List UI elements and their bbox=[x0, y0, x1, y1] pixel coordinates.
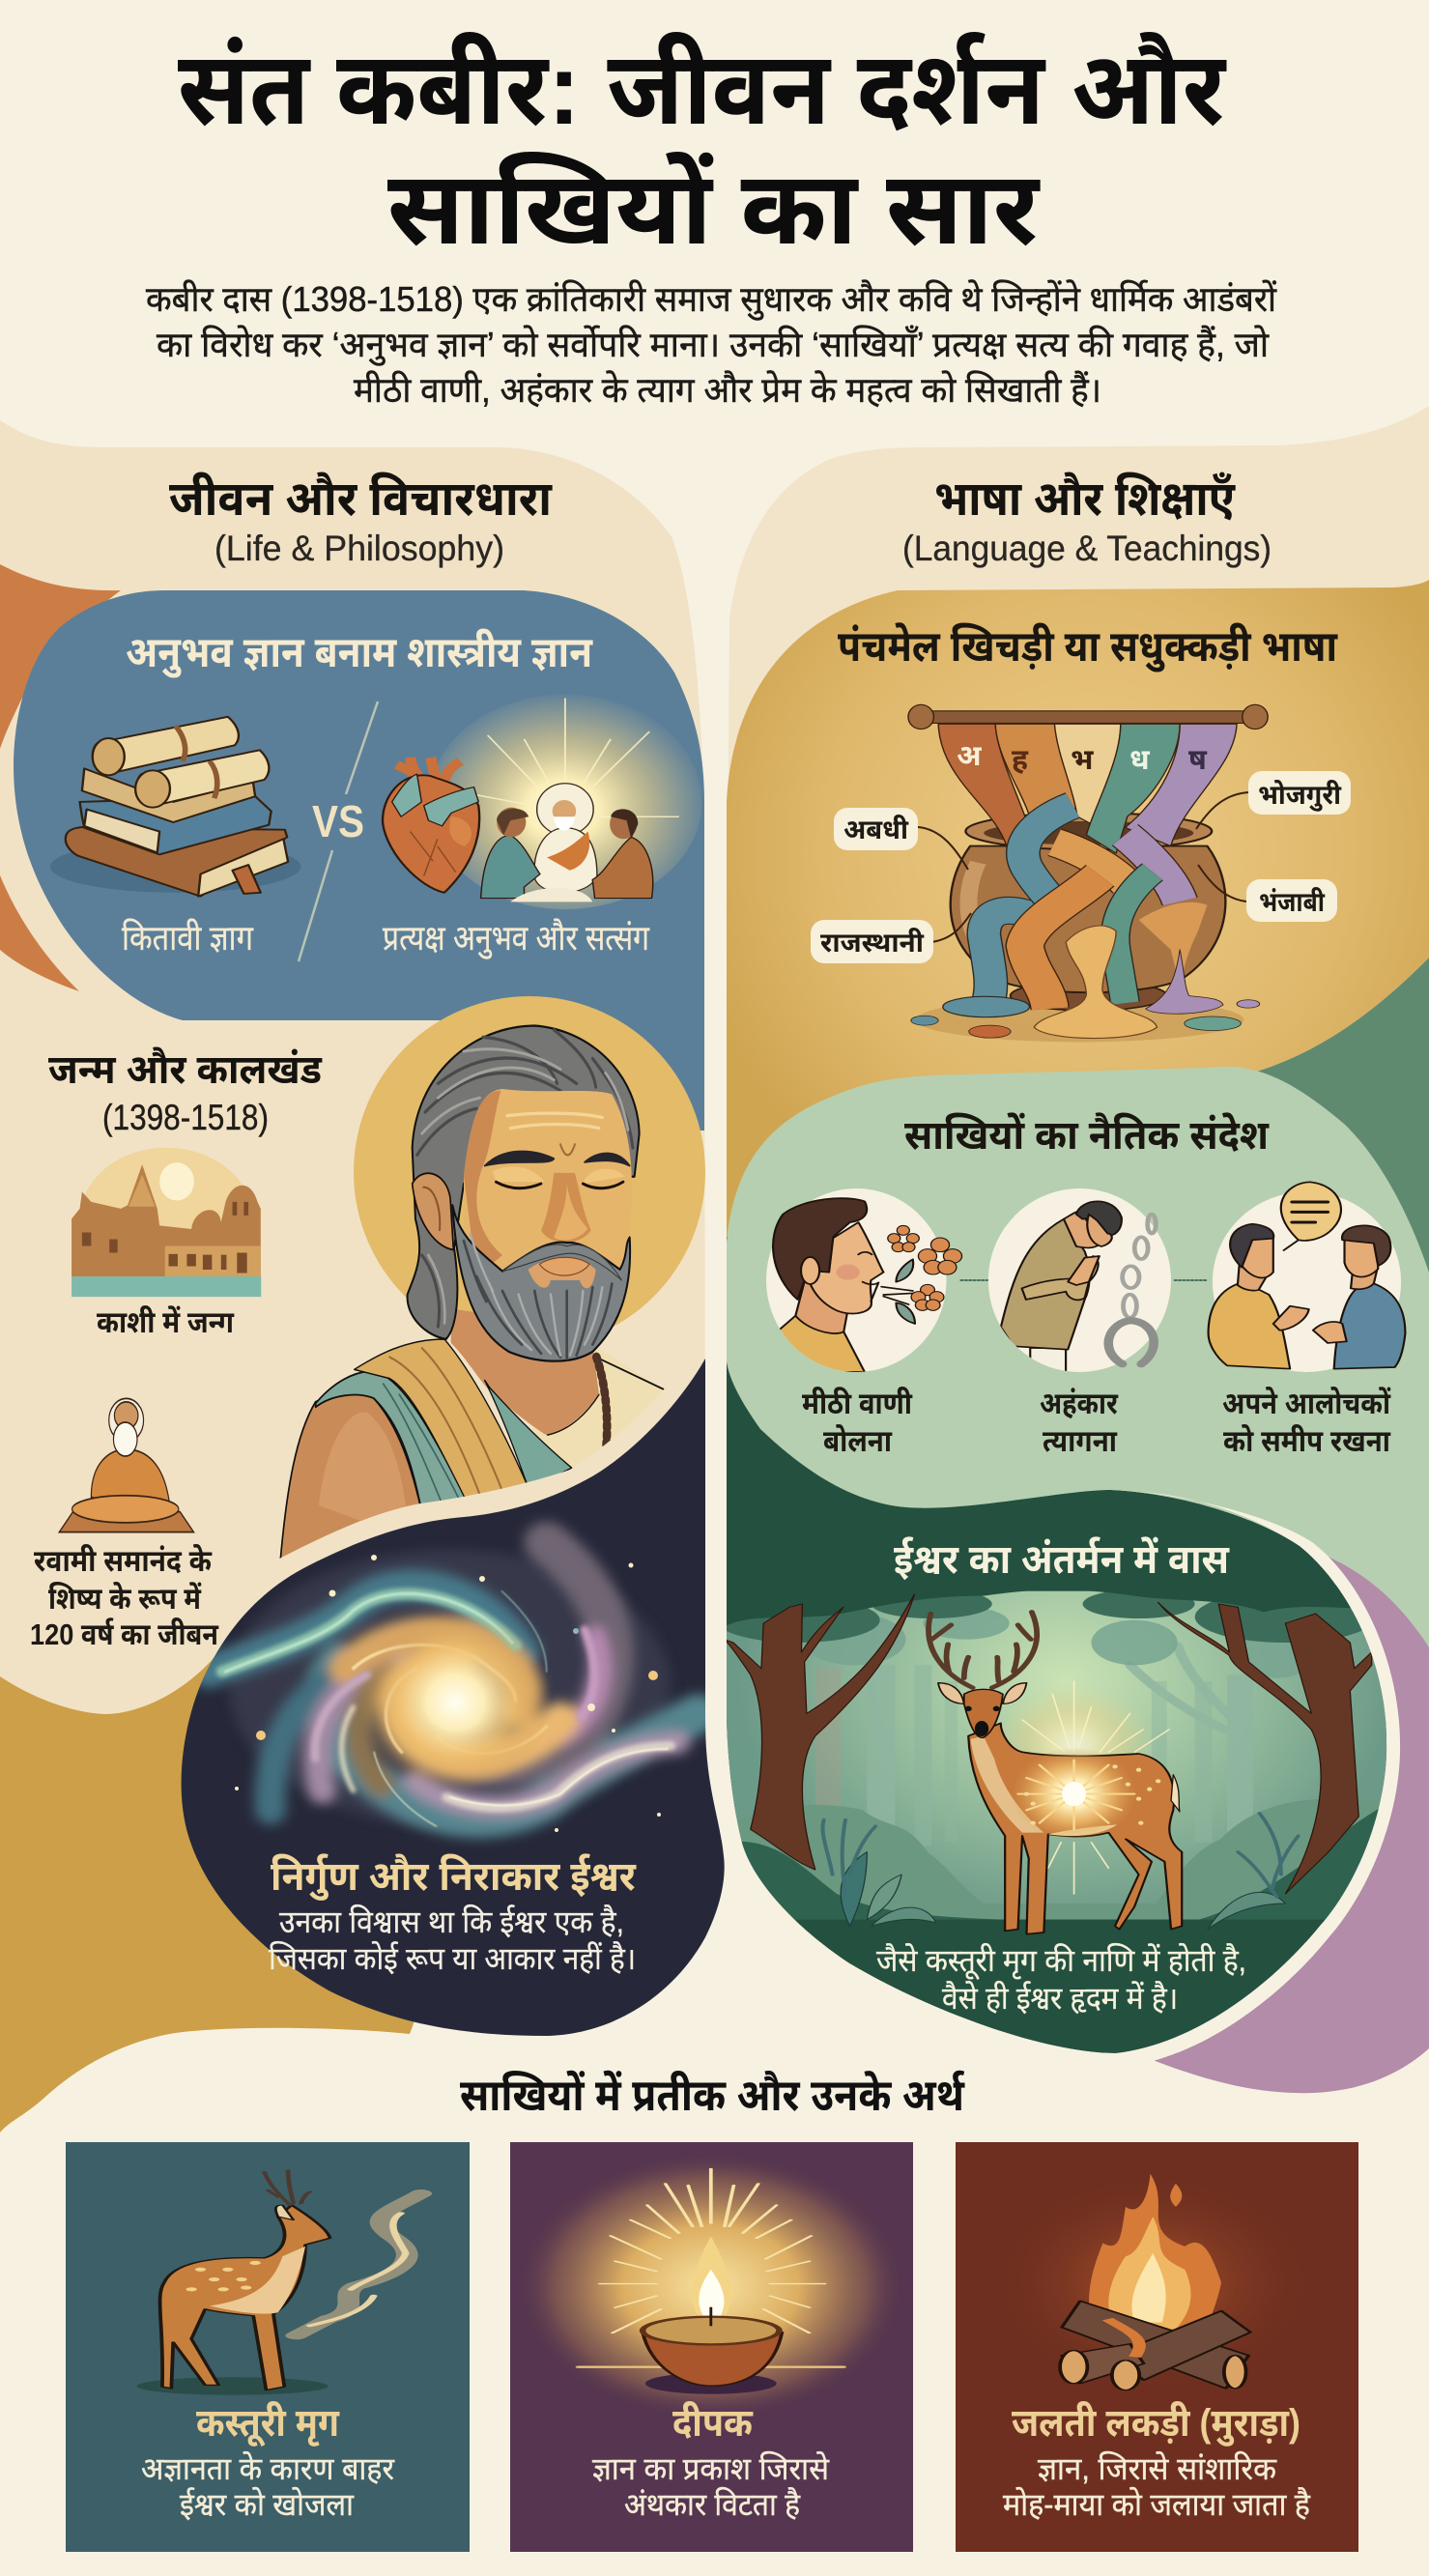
orange accent shapes bbox=[0, 564, 121, 991]
panel: god within bbox=[716, 1536, 1401, 2016]
text: disciple and lifespan: शिष्य के रूप में bbox=[48, 1582, 202, 1616]
face bbox=[464, 1089, 632, 1190]
callout lines bbox=[918, 792, 1248, 942]
label: Punjabi bbox=[1246, 879, 1337, 922]
text: book knowledge: कितावी ज्ञाग bbox=[122, 918, 254, 958]
label: Awadhi bbox=[834, 808, 918, 850]
intro paragraph: का विरोध कर ‘अनुभव ज्ञान’ को सर्वोपरि माना। उनकी ‘साखियाँ’ प्रत्यक्ष सत्य की गवाह हैं, जो bbox=[157, 324, 1270, 366]
icon: meditating guru bbox=[59, 1398, 193, 1532]
card: musk deer bbox=[66, 2142, 470, 2552]
labels: three morals: बोलना bbox=[823, 1424, 893, 1458]
label: Punjabi: भंजाबी bbox=[1259, 886, 1326, 917]
shirt and neck bbox=[531, 1348, 663, 1469]
icon: spiral galaxy bbox=[209, 1543, 699, 1832]
icon: heart and satsang bbox=[381, 696, 701, 909]
text: burning wood meaning: जलती लकड़ी (मुराड़ा) bbox=[1012, 2401, 1300, 2447]
block: birth and era bbox=[30, 1046, 323, 1651]
heading: experience vs scripture: अनुभव ज्ञान बनाम शास्त्रीय ज्ञान bbox=[126, 628, 593, 678]
label: Awadhi: अबधी bbox=[843, 814, 909, 844]
border of god within panel bbox=[843, 1492, 1400, 2068]
title bbox=[178, 32, 1227, 266]
heading: birth and era: (1398-1518) bbox=[102, 1098, 269, 1137]
text: musk deer meaning bbox=[141, 2401, 395, 2522]
text: lamp meaning: अंथकार विटता है bbox=[624, 2487, 801, 2522]
purple accent shape bbox=[1153, 1536, 1429, 2093]
text: musk deer meaning: ईश्वर को खोजला bbox=[180, 2487, 355, 2522]
text: disciple and lifespan: 120 वर्ष का जीबन bbox=[30, 1617, 219, 1651]
text: lamp meaning: ज्ञान का प्रकाश जिरासे bbox=[592, 2451, 830, 2486]
left tree bbox=[725, 1594, 914, 1870]
icon: diya lamp bbox=[515, 2151, 907, 2421]
left gold background band bbox=[0, 1449, 676, 2132]
plants bbox=[822, 1814, 1299, 1930]
text: musk deer analogy: जैसे कस्तूरी मृग की नाणि में होती है, bbox=[876, 1943, 1246, 1980]
text: musk deer analogy: वैसे ही ईश्वर हृदम में है। bbox=[942, 1981, 1178, 2016]
heading: life and philosophy: (Life & Philosophy) bbox=[214, 529, 504, 568]
text: disciple and lifespan: रवामी समानंद के bbox=[34, 1544, 213, 1578]
intro paragraph bbox=[146, 279, 1277, 410]
intro paragraph: मीठी वाणी, अहंकार के त्याग और प्रेम के महत्व को सिखाती हैं। bbox=[354, 370, 1101, 410]
teal fold bbox=[485, 1380, 572, 1488]
heading: life and philosophy bbox=[169, 472, 553, 568]
labels: three morals: अपने आलोचकों bbox=[1222, 1387, 1391, 1420]
heading: god within: ईश्वर का अंतर्मन में वास bbox=[894, 1536, 1230, 1582]
panel: formless god (galaxy) bbox=[182, 1359, 725, 2036]
green sash bbox=[316, 1371, 471, 1512]
heading: mixed language: पंचमेल खिचड़ी या सधुक्कड़ी भाषा bbox=[838, 621, 1338, 673]
heading: life and philosophy: जीवन और विचारधारा bbox=[169, 472, 553, 526]
ribbon letters: ष bbox=[1188, 744, 1208, 776]
panel: god within (dark backdrop) bbox=[727, 1237, 1386, 2053]
ribbon letters bbox=[957, 740, 1208, 776]
text: musk deer meaning: कस्तूरी मृग bbox=[196, 2401, 340, 2447]
label: Rajasthani bbox=[811, 920, 933, 963]
heading: birth and era bbox=[48, 1046, 323, 1137]
labels: three morals: त्यागना bbox=[1043, 1424, 1118, 1458]
moustache bbox=[502, 1245, 621, 1280]
heading: moral message: साखियों का नैतिक संदेश bbox=[904, 1112, 1270, 1158]
hair bbox=[408, 1025, 640, 1339]
text: burning wood meaning bbox=[1003, 2401, 1311, 2522]
panel: moral message of sakhis bbox=[727, 1067, 1429, 1647]
heading: symbols and meanings: साखियों में प्रतीक और उनके अर्थ bbox=[460, 2069, 965, 2120]
icon: Kashi skyline bbox=[71, 1148, 261, 1297]
text: direct experience and satsang: प्रत्यक्ष अनुभव और सत्संग bbox=[383, 918, 650, 959]
shoulder bbox=[280, 1393, 422, 1562]
text: burning wood meaning: मोह-माया को जलाया जाता है bbox=[1003, 2487, 1311, 2522]
ribbon letters: भ bbox=[1071, 744, 1094, 776]
label: Bhojpuri: भोजगुरी bbox=[1258, 779, 1342, 812]
text: lamp meaning: दीपक bbox=[672, 2401, 754, 2445]
mid green background band bbox=[1246, 958, 1429, 1662]
ribbon letters: अ bbox=[957, 740, 983, 772]
labels: three morals: अहंकार bbox=[1040, 1387, 1119, 1420]
brows, eyes bbox=[485, 1152, 630, 1165]
heading: language and teachings: भाषा और शिक्षाएँ bbox=[934, 472, 1236, 526]
panel: life and philosophy bbox=[0, 420, 705, 1714]
card: lamp bbox=[510, 2142, 913, 2552]
right tree bbox=[1158, 1602, 1372, 1894]
head bbox=[938, 1683, 1027, 1703]
panel: mixed language bbox=[727, 580, 1429, 1266]
text: burning wood meaning: ज्ञान, जिरासे सांशारिक bbox=[1038, 2451, 1277, 2486]
text: formless god: निर्गुण और निराकार ईश्वर bbox=[271, 1853, 637, 1901]
text: formless god: उनका विश्वास था कि ईश्वर एक है, bbox=[279, 1904, 624, 1939]
label: Rajasthani: राजस्थानी bbox=[820, 927, 925, 958]
ribbons bbox=[938, 724, 1034, 846]
icon: books and scrolls bbox=[50, 717, 300, 897]
illustration: musk deer in forest bbox=[716, 1585, 1401, 1942]
label: Bhojpuri bbox=[1248, 771, 1351, 815]
icon: sweet speech bbox=[766, 1188, 1209, 1372]
braid strands bbox=[984, 805, 1180, 1009]
deer bbox=[968, 1723, 1182, 1934]
title: साखियों का सार bbox=[387, 152, 1041, 266]
text: formless god bbox=[269, 1853, 637, 1976]
yellow drape bbox=[355, 1339, 531, 1505]
ear bbox=[413, 1173, 453, 1249]
nose bbox=[541, 1173, 591, 1243]
text: lamp meaning bbox=[592, 2401, 830, 2522]
labels: three morals bbox=[802, 1387, 1391, 1458]
ribbon letters: ध bbox=[1129, 744, 1151, 776]
heading: birth and era: जन्म और कालखंड bbox=[48, 1046, 323, 1092]
text: formless god: जिसका कोई रूप या आकार नहीं है। bbox=[269, 1941, 636, 1976]
text: musk deer meaning: अज्ञानता के कारण बाहर bbox=[141, 2451, 395, 2486]
divider with VS: VS bbox=[312, 796, 364, 846]
icon: keep critics close bbox=[1209, 1182, 1405, 1372]
heading: language and teachings bbox=[902, 472, 1272, 568]
panel: experience vs scripture bbox=[14, 590, 708, 1131]
icon: pot with braided ribbons bbox=[908, 704, 1268, 1042]
title: संत कबीर: जीवन दर्शन और bbox=[178, 32, 1227, 146]
icon: giving up ego bbox=[988, 1188, 1171, 1372]
text: disciple and lifespan bbox=[30, 1544, 219, 1651]
card: burning wood bbox=[956, 2142, 1358, 2552]
glow rays bbox=[1005, 1695, 1147, 1755]
heading: language and teachings: (Language & Teachings) bbox=[902, 529, 1272, 568]
labels: three morals: मीठी वाणी bbox=[802, 1387, 913, 1420]
portrait: Sant Kabir with halo bbox=[280, 996, 705, 1562]
text: born in Kashi: काशी में जन्ग bbox=[97, 1305, 235, 1339]
intro paragraph: कबीर दास (1398-1518) एक क्रांतिकारी समाज सुधारक और कवि थे जिन्होंने धार्मिक आडंबरों bbox=[146, 279, 1277, 321]
rod bbox=[916, 711, 1262, 723]
mouth bbox=[529, 1257, 596, 1288]
text: musk deer analogy bbox=[876, 1943, 1246, 2016]
divider with VS bbox=[299, 701, 378, 961]
labels: three morals: को समीप रखना bbox=[1223, 1424, 1391, 1458]
icon: burning logs bbox=[989, 2170, 1317, 2395]
panel: language and teachings header bbox=[728, 406, 1429, 870]
ribbon letters: ह bbox=[1012, 744, 1029, 776]
icon: musk deer bbox=[136, 2170, 421, 2395]
beard bbox=[452, 1205, 630, 1361]
